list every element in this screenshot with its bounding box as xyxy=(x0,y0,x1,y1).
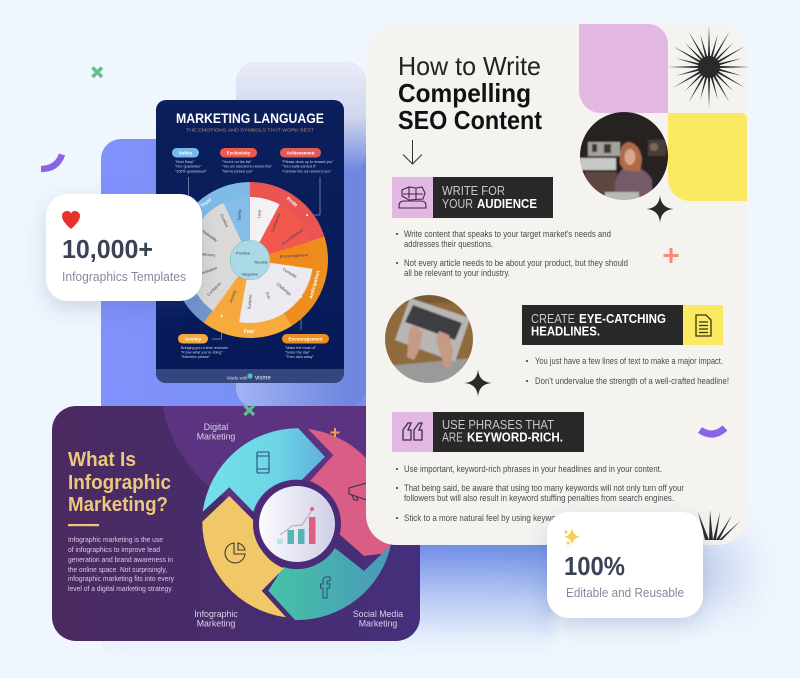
pill: achievement xyxy=(280,148,334,173)
heading: MARKETING LANGUAGE xyxy=(176,111,324,126)
title: How to Write xyxy=(398,51,541,81)
pill: anxiety: "Attention please" xyxy=(181,355,211,359)
wheel chart: Challenge xyxy=(275,281,293,297)
text: keyword bullets: followers but will also result in keyword stuffing penalties from search engines. xyxy=(404,493,674,504)
wheel chart: Safety xyxy=(236,209,242,221)
section: use phrases that are keyword-rich: USE PHRASES THAT xyxy=(442,418,554,432)
section: write for your audience xyxy=(392,177,553,218)
section: use phrases that are keyword-rich: KEYWORD-RICH. xyxy=(467,430,563,444)
text: audience bullets: all be relevant to your industry. xyxy=(404,268,510,279)
section: write for your audience: YOUR xyxy=(442,197,473,211)
paragraph: the online space. Not surprisingly, xyxy=(68,565,167,574)
pill: anxiety: Bringing you a time reminder xyxy=(181,346,229,350)
pill: encouragement: "Make the most of" xyxy=(285,346,317,350)
wheel chart: Confidence xyxy=(270,211,282,233)
labels: Digital xyxy=(204,422,228,432)
paragraph: level of a digital marketing strategy. xyxy=(68,584,173,593)
icon: audience xyxy=(399,187,426,208)
pill: safety xyxy=(172,148,207,173)
icon: green cross lower xyxy=(244,406,254,415)
icon: bottom starburst xyxy=(698,510,740,540)
pill: anxiety: Anxiety xyxy=(185,337,202,342)
title: Compelling xyxy=(398,78,531,108)
icon: sparkle lower xyxy=(464,369,492,397)
pill: achievement: "You really earned it" xyxy=(282,165,317,169)
labels: Marketing xyxy=(197,432,235,442)
photo: woman at laptop xyxy=(578,110,670,202)
text: audience bullets xyxy=(396,229,628,279)
pill: exclusivity xyxy=(220,148,273,173)
icon: megaphone xyxy=(349,483,367,500)
icon: coral plus xyxy=(664,248,678,263)
footer bar xyxy=(156,369,344,383)
section: create eye-catching headlines: HEADLINES. xyxy=(531,324,600,338)
wheel chart: Fear xyxy=(244,329,254,335)
text: audience bullets: addresses their questions. xyxy=(404,239,493,250)
wheel chart: Pride xyxy=(285,196,299,209)
divider xyxy=(68,524,99,526)
pill: anxiety xyxy=(178,334,229,359)
section: create eye-catching headlines: CREATE xyxy=(531,312,575,326)
heading: Marketing? xyxy=(68,494,168,516)
pill: safety: "Our guarantee" xyxy=(175,165,202,169)
wheel chart: Encouragement xyxy=(280,252,309,259)
wheel chart xyxy=(152,162,348,358)
card: 10,000+ templates xyxy=(46,194,202,301)
paragraph: Infographic marketing is the use xyxy=(68,535,163,544)
text: keyword bullets: That being said, be aware that using too many keywords will not only turn off your xyxy=(404,483,685,494)
labels: Infographic xyxy=(194,609,238,619)
icon: starburst xyxy=(668,26,750,108)
icon: orange plus xyxy=(330,428,340,437)
connector lines xyxy=(188,177,320,339)
pill: anxiety: "Know what you're doing" xyxy=(181,350,223,354)
pill: encouragement: "Then click away" xyxy=(285,355,315,359)
pill: achievement: Achievement xyxy=(286,151,315,156)
labels: Marketing xyxy=(366,432,404,442)
icon: facebook xyxy=(320,577,330,598)
panel: SEO content xyxy=(366,24,750,545)
section: write for your audience: WRITE FOR xyxy=(442,184,505,198)
wheel chart: Confusion xyxy=(206,281,222,297)
labels xyxy=(194,422,404,628)
pill: encouragement: Encouragement xyxy=(288,337,323,342)
text: audience bullets: Not every article needs to be about your product, but they should xyxy=(404,258,628,269)
section: create eye-catching headlines: EYE-CATCHING xyxy=(579,312,666,326)
icon: sparkles xyxy=(564,528,580,546)
icon: purple arc right xyxy=(700,428,725,434)
icon: pie chart xyxy=(225,543,245,563)
pill: achievement: "Please done up to reward you" xyxy=(282,160,334,164)
footer bar: Made with xyxy=(227,376,248,380)
wheel chart: Curiosity xyxy=(282,267,298,279)
panel: marketing language xyxy=(152,100,348,383)
wheel chart: Hesitation xyxy=(199,265,218,276)
text: keyword bullets xyxy=(396,464,685,524)
wheel chart: Accomplished xyxy=(281,228,304,246)
heading: What Is xyxy=(68,449,136,471)
section: use phrases that are keyword-rich xyxy=(392,412,584,452)
pill: safety: Safety xyxy=(179,151,193,156)
section: use phrases that are keyword-rich: ARE xyxy=(442,430,463,444)
pill: exclusivity: "You're on the list" xyxy=(222,160,252,164)
section: create eye-catching headlines xyxy=(522,305,723,345)
pill: exclusivity: "We've picked you" xyxy=(222,169,254,173)
paragraph: of infographics to improve lead xyxy=(68,545,160,554)
panel: what is infographic marketing xyxy=(52,406,420,641)
heading: Infographic xyxy=(68,472,171,494)
text: headline bullets: Don't undervalue the strength of a well-crafted headline! xyxy=(535,376,729,387)
icon: chart xyxy=(277,507,316,544)
arrow xyxy=(403,140,422,164)
pink block xyxy=(579,24,668,113)
icon: phone xyxy=(257,452,269,473)
pill: exclusivity: "You are selected to receive this" xyxy=(222,165,273,169)
card: 100% editable xyxy=(547,512,703,618)
text: headline bullets xyxy=(526,356,729,387)
paragraph: infographic marketing fits into every xyxy=(68,574,174,583)
title xyxy=(398,51,542,135)
icon: green cross top xyxy=(92,68,102,77)
wheel chart: Positive xyxy=(236,250,251,256)
labels: Social Media xyxy=(353,609,403,619)
cycle chart xyxy=(202,428,392,620)
labels: Marketing xyxy=(197,618,235,628)
yellow block xyxy=(668,113,747,201)
labels: Marketing xyxy=(359,618,397,628)
wheel chart: Reliability xyxy=(201,229,218,243)
footer bar: visme xyxy=(255,376,271,382)
caption: Infographics Templates xyxy=(62,269,186,284)
section: write for your audience: AUDIENCE xyxy=(477,197,537,211)
stat: 100% xyxy=(564,551,625,581)
pill: achievement: "Consider this our reward to you" xyxy=(282,169,332,173)
wheel chart: Negative xyxy=(242,272,259,276)
paragraph xyxy=(68,535,174,593)
icon: quotes xyxy=(403,423,422,440)
heading xyxy=(68,449,171,516)
icon: purple arc left xyxy=(41,154,62,169)
pill: safety: "Best Easy" xyxy=(175,160,195,164)
wheel chart: Love xyxy=(256,209,262,218)
labels: Content xyxy=(370,422,401,432)
pill: encouragement xyxy=(282,334,329,359)
backdrop: blue panels xyxy=(95,62,740,665)
text: keyword bullets: Stick to a more natural feel by using keywords. xyxy=(404,513,569,524)
pill: safety: "100% guaranteed" xyxy=(175,169,207,173)
wheel chart: Fun xyxy=(265,291,272,300)
wheel chart: Memory xyxy=(201,251,216,258)
wheel chart: Anticipation xyxy=(308,270,322,299)
wheel chart: Surprise xyxy=(246,293,253,310)
icon: document xyxy=(696,315,711,336)
icon: heart xyxy=(62,211,80,229)
subheading: THE EMOTIONS AND SYMBOLS THAT WORK BEST xyxy=(186,128,314,132)
photo: hands on laptop xyxy=(384,294,474,384)
text: audience bullets: Write content that speaks to your target market's needs and xyxy=(404,229,611,240)
wheel chart: Comfort xyxy=(219,213,230,229)
pill: encouragement: "Seize the day" xyxy=(285,350,311,354)
title: SEO Content xyxy=(398,105,542,135)
pill: exclusivity: Exclusivity xyxy=(227,151,251,156)
caption: Editable and Reusable xyxy=(566,585,684,600)
wheel chart: Trust xyxy=(200,197,213,209)
paragraph: generation and brand awareness in xyxy=(68,555,173,564)
icon: sparkle top xyxy=(646,195,674,223)
stat: 10,000+ xyxy=(62,234,153,264)
wheel chart: Neutral xyxy=(255,260,268,264)
text: headline bullets: You just have a few lines of text to make a major impact. xyxy=(535,356,723,367)
text: keyword bullets: Use important, keyword-rich phrases in your headlines and in your content. xyxy=(404,464,662,475)
wheel chart: Anxiety xyxy=(228,289,237,304)
